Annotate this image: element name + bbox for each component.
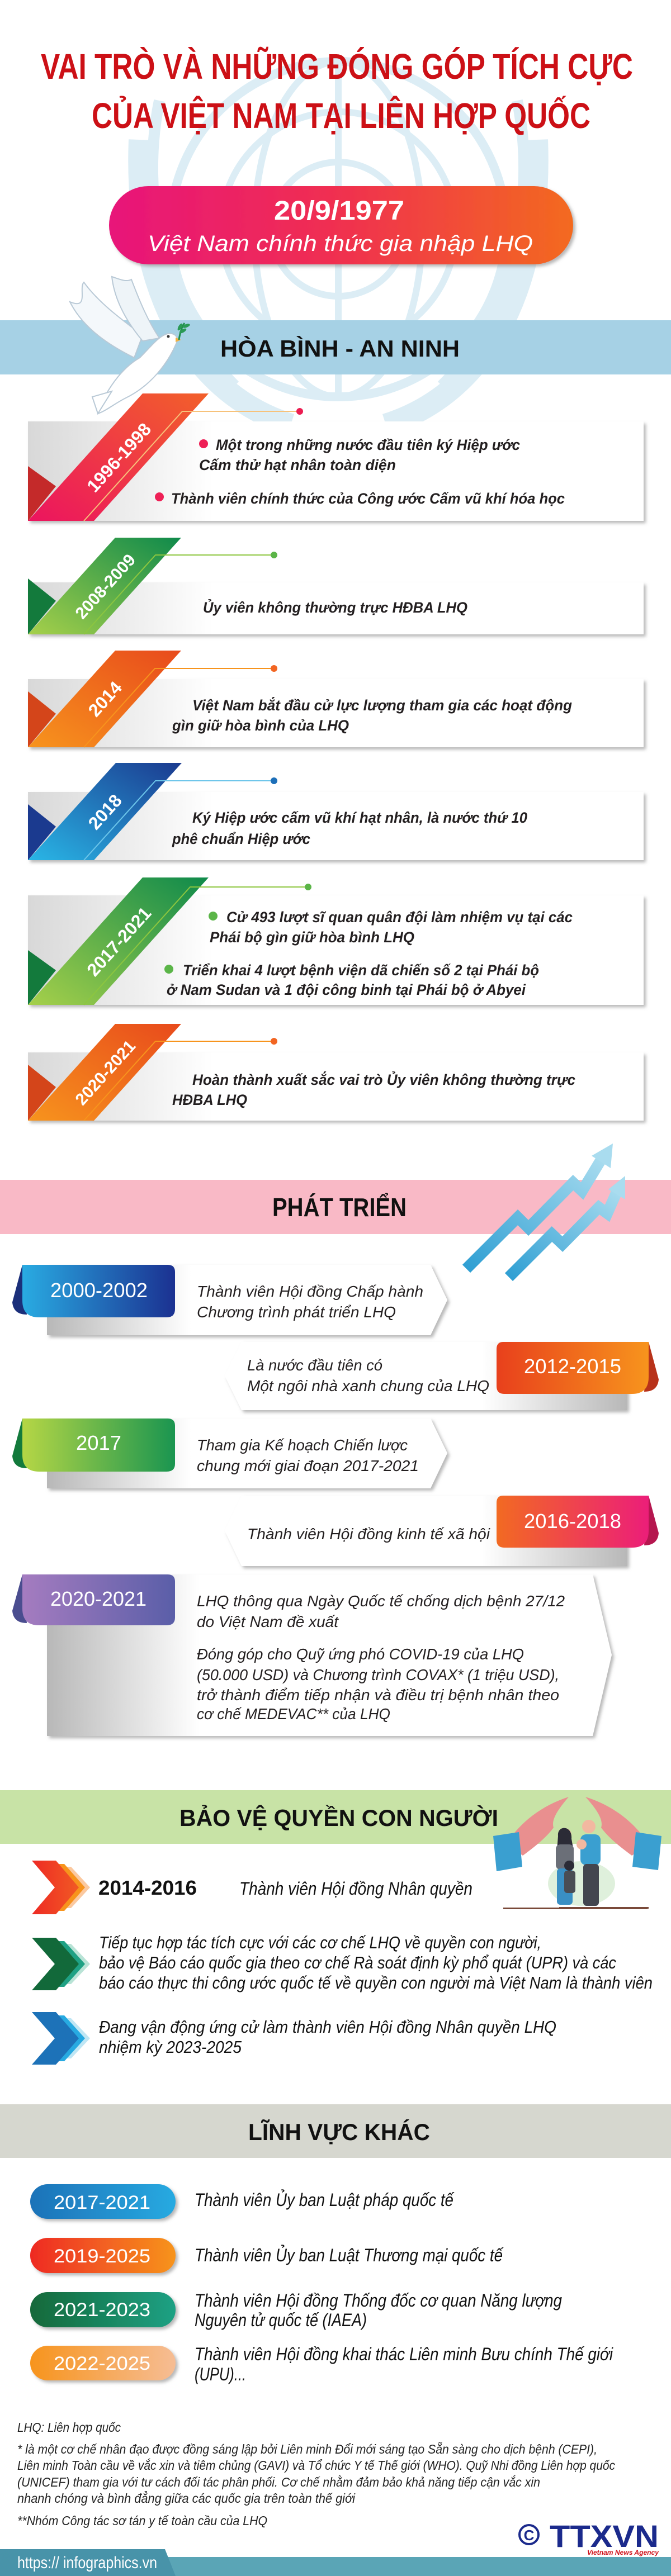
section heading: Bảo vệ quyền con người: BẢO VỆ QUYỀN CON NGƯỜI bbox=[179, 1804, 498, 1831]
logo: TTXVN: C bbox=[524, 2527, 535, 2544]
card: 1996-1998: Thành viên chính thức của Công ước Cấm vũ khí hóa học bbox=[171, 490, 565, 507]
row: 2020-2021: trở thành điểm tiếp nhận và điều trị bệnh nhân theo bbox=[197, 1686, 559, 1704]
chevron item: candidacy 2023-2025: Đang vận động ứng cử làm thành viên Hội đồng Nhân quyền LHQ bbox=[99, 2017, 556, 2037]
card: 2014: Việt Nam bắt đầu cử lực lượng tham gia các hoạt động bbox=[192, 696, 572, 714]
date pill bbox=[109, 186, 573, 264]
row: 2012-2015: 2012-2015 bbox=[524, 1355, 621, 1378]
pill row: 2021-2023 bbox=[30, 2290, 562, 2330]
logo: TTXVN: TTXVN bbox=[550, 2518, 659, 2554]
pill row: 2021-2023: 2021-2023 bbox=[54, 2299, 150, 2321]
logo: TTXVN bbox=[519, 2518, 659, 2556]
pill row: 2022-2025: (UPU)... bbox=[195, 2364, 246, 2384]
row: 2020-2021: LHQ thông qua Ngày Quốc tế chống dịch bệnh 27/12 bbox=[197, 1592, 565, 1610]
chevron item: cooperation with UN human rights mechanisms: Tiếp tục hợp tác tích cực với các cơ chế LHQ về quyền con người, bbox=[99, 1933, 541, 1952]
chevron item: 2014-2016: 2014-2016 bbox=[98, 1876, 197, 1899]
card: 2017-2021 bbox=[28, 877, 644, 1005]
pill row: 2021-2023: Thành viên Hội đồng Thống đốc cơ quan Năng lượng bbox=[195, 2290, 562, 2311]
icon: protecting hands over family bbox=[493, 1797, 661, 1909]
card: 2017-2021: Phái bộ gìn giữ hòa bình LHQ bbox=[210, 929, 414, 946]
footer bar with website: https:// infographics.vn bbox=[17, 2554, 157, 2572]
section heading: Hòa bình - An ninh bbox=[0, 320, 671, 374]
row: 2020-2021 bbox=[12, 1574, 612, 1736]
chevron item: cooperation with UN human rights mechanisms bbox=[32, 1933, 653, 1993]
date pill: 20/9/1977 bbox=[274, 196, 404, 226]
row: 2017: Tham gia Kế hoạch Chiến lược bbox=[197, 1436, 408, 1454]
pill row: 2019-2025: Thành viên Ủy ban Luật Thương mại quốc tế bbox=[195, 2245, 504, 2265]
card: 2020-2021: 2020-2021 bbox=[72, 1037, 139, 1109]
card: 2018: phê chuẩn Hiệp ước bbox=[172, 831, 310, 847]
date pill: Việt Nam chính thức gia nhập LHQ bbox=[148, 231, 533, 256]
footnotes: nhanh chóng và bình đẳng giữa các quốc gia trên toàn thế giới bbox=[17, 2490, 356, 2506]
pill row: 2022-2025: 2022-2025 bbox=[54, 2353, 150, 2374]
card: 2020-2021: Hoàn thành xuất sắc vai trò Ủy viên không thường trực bbox=[192, 1070, 575, 1088]
card: 2008-2009: 2008-2009 bbox=[72, 551, 139, 623]
pill row: 2022-2025: Thành viên Hội đồng khai thác Liên minh Bưu chính Thế giới bbox=[195, 2344, 613, 2364]
section heading: Hòa bình - An ninh: HÒA BÌNH - AN NINH bbox=[220, 335, 460, 362]
card: 2018: 2018 bbox=[84, 790, 126, 833]
card: 1996-1998: Cấm thử hạt nhân toàn diện bbox=[199, 457, 396, 473]
footnotes: LHQ: Liên hợp quốc bbox=[17, 2420, 121, 2435]
card: 2014: 2014 bbox=[84, 677, 126, 720]
card: 2020-2021 bbox=[28, 1024, 644, 1121]
row: 2020-2021: (50.000 USD) và Chương trình COVAX* (1 triệu USD), bbox=[197, 1666, 559, 1683]
row: 2000-2002: Chương trình phát triển LHQ bbox=[197, 1303, 396, 1321]
row: 2016-2018: 2016-2018 bbox=[524, 1510, 621, 1533]
card: 1996-1998 bbox=[28, 393, 644, 521]
card: 2008-2009: Ủy viên không thường trực HĐBA LHQ bbox=[203, 598, 467, 616]
card: 2018: Ký Hiệp ước cấm vũ khí hạt nhân, là nước thứ 10 bbox=[192, 809, 527, 826]
chevron item: 2014-2016: Thành viên Hội đồng Nhân quyền bbox=[239, 1878, 472, 1899]
card: 2014: gìn giữ hòa bình của LHQ bbox=[172, 717, 349, 734]
footnotes bbox=[17, 2420, 615, 2528]
card: 2017-2021: ở Nam Sudan và 1 đội công binh tại Phái bộ ở Abyei bbox=[167, 981, 526, 998]
section heading: Bảo vệ quyền con người bbox=[0, 1790, 671, 1844]
footnotes: * là một cơ chế nhân đạo được đồng sáng lập bởi Liên minh Đổi mới sáng tạo Sẵn sàng cho dịch bệnh (CEPI), bbox=[17, 2441, 597, 2456]
card: 2014 bbox=[28, 651, 644, 747]
row: 2020-2021: do Việt Nam đề xuất bbox=[197, 1613, 339, 1630]
card: 1996-1998: 1996-1998 bbox=[83, 419, 155, 496]
row: 2012-2015: Là nước đầu tiên có bbox=[247, 1356, 382, 1374]
row: 2017 bbox=[12, 1419, 447, 1488]
row: 2000-2002: 2000-2002 bbox=[50, 1279, 148, 1302]
footnotes: **Nhóm Công tác sơ tán y tế toàn cầu của LHQ bbox=[17, 2513, 267, 2528]
row: 2020-2021: Đóng góp cho Quỹ ứng phó COVID-19 của LHQ bbox=[197, 1645, 524, 1663]
row: 2016-2018 bbox=[225, 1496, 659, 1566]
pill row: 2022-2025 bbox=[30, 2344, 613, 2384]
row: 2012-2015: Một ngôi nhà xanh chung của LHQ bbox=[247, 1377, 489, 1394]
row: 2000-2002 bbox=[12, 1265, 447, 1335]
card: 2018 bbox=[28, 763, 644, 860]
card: 1996-1998: Một trong những nước đầu tiên ký Hiệp ước bbox=[216, 437, 520, 453]
logo: TTXVN: Vietnam News Agency bbox=[587, 2549, 659, 2556]
section heading: Phát triển: PHÁT TRIỂN bbox=[272, 1193, 407, 1222]
footnotes: Liên minh Toàn cầu về vắc xin và tiêm chủng (GAVI) và Tổ chức Y tế Thế giới (WHO). Quỹ Nhi đồng Liên hợp quốc bbox=[17, 2458, 615, 2473]
pill row: 2019-2025 bbox=[30, 2238, 504, 2273]
row: 2012-2015 bbox=[225, 1342, 659, 1410]
card: 2020-2021: HĐBA LHQ bbox=[172, 1092, 247, 1108]
row: 2020-2021: cơ chế MEDEVAC** của LHQ bbox=[197, 1705, 390, 1723]
icon: dove with olive branch bbox=[70, 277, 191, 414]
pill row: 2017-2021: Thành viên Ủy ban Luật pháp quốc tế bbox=[195, 2190, 455, 2210]
chevron item: 2014-2016 bbox=[32, 1861, 472, 1914]
card: 2017-2021: Triển khai 4 lượt bệnh viện dã chiến số 2 tại Phái bộ bbox=[183, 962, 539, 979]
pill row: 2017-2021: 2017-2021 bbox=[54, 2192, 150, 2213]
row: 2020-2021: 2020-2021 bbox=[50, 1587, 147, 1610]
chevron item: candidacy 2023-2025: nhiệm kỳ 2023-2025 bbox=[99, 2037, 242, 2057]
row: 2017: chung mới giai đoạn 2017-2021 bbox=[197, 1457, 419, 1474]
background: UN emblem bbox=[139, 61, 537, 425]
row: 2017: 2017 bbox=[76, 1431, 121, 1454]
pill row: 2017-2021 bbox=[30, 2184, 455, 2219]
footer bar with website bbox=[0, 2549, 671, 2576]
row: 2016-2018: Thành viên Hội đồng kinh tế xã hội bbox=[247, 1525, 490, 1543]
card: 2008-2009 bbox=[28, 538, 644, 634]
title bbox=[41, 46, 633, 136]
section heading: Phát triển bbox=[0, 1180, 671, 1234]
pill row: 2019-2025: 2019-2025 bbox=[54, 2246, 150, 2267]
chevron item: candidacy 2023-2025 bbox=[32, 2012, 556, 2065]
card: 2017-2021: 2017-2021 bbox=[83, 903, 155, 980]
section heading: Lĩnh vực khác: LĨNH VỰC KHÁC bbox=[248, 2119, 430, 2145]
pill row: 2021-2023: Nguyên tử quốc tế (IAEA) bbox=[195, 2310, 367, 2330]
section heading: Lĩnh vực khác bbox=[0, 2104, 671, 2158]
row: 2000-2002: Thành viên Hội đồng Chấp hành bbox=[197, 1283, 423, 1300]
footnotes: (UNICEF) tham gia với tư cách đối tác phân phối. Cơ chế nhằm đảm bảo khả năng tiếp cận vắc xin bbox=[17, 2475, 540, 2489]
icon: rising arrows bbox=[466, 1144, 625, 1277]
card: 2017-2021: Cử 493 lượt sĩ quan quân đội làm nhiệm vụ tại các bbox=[226, 909, 573, 926]
